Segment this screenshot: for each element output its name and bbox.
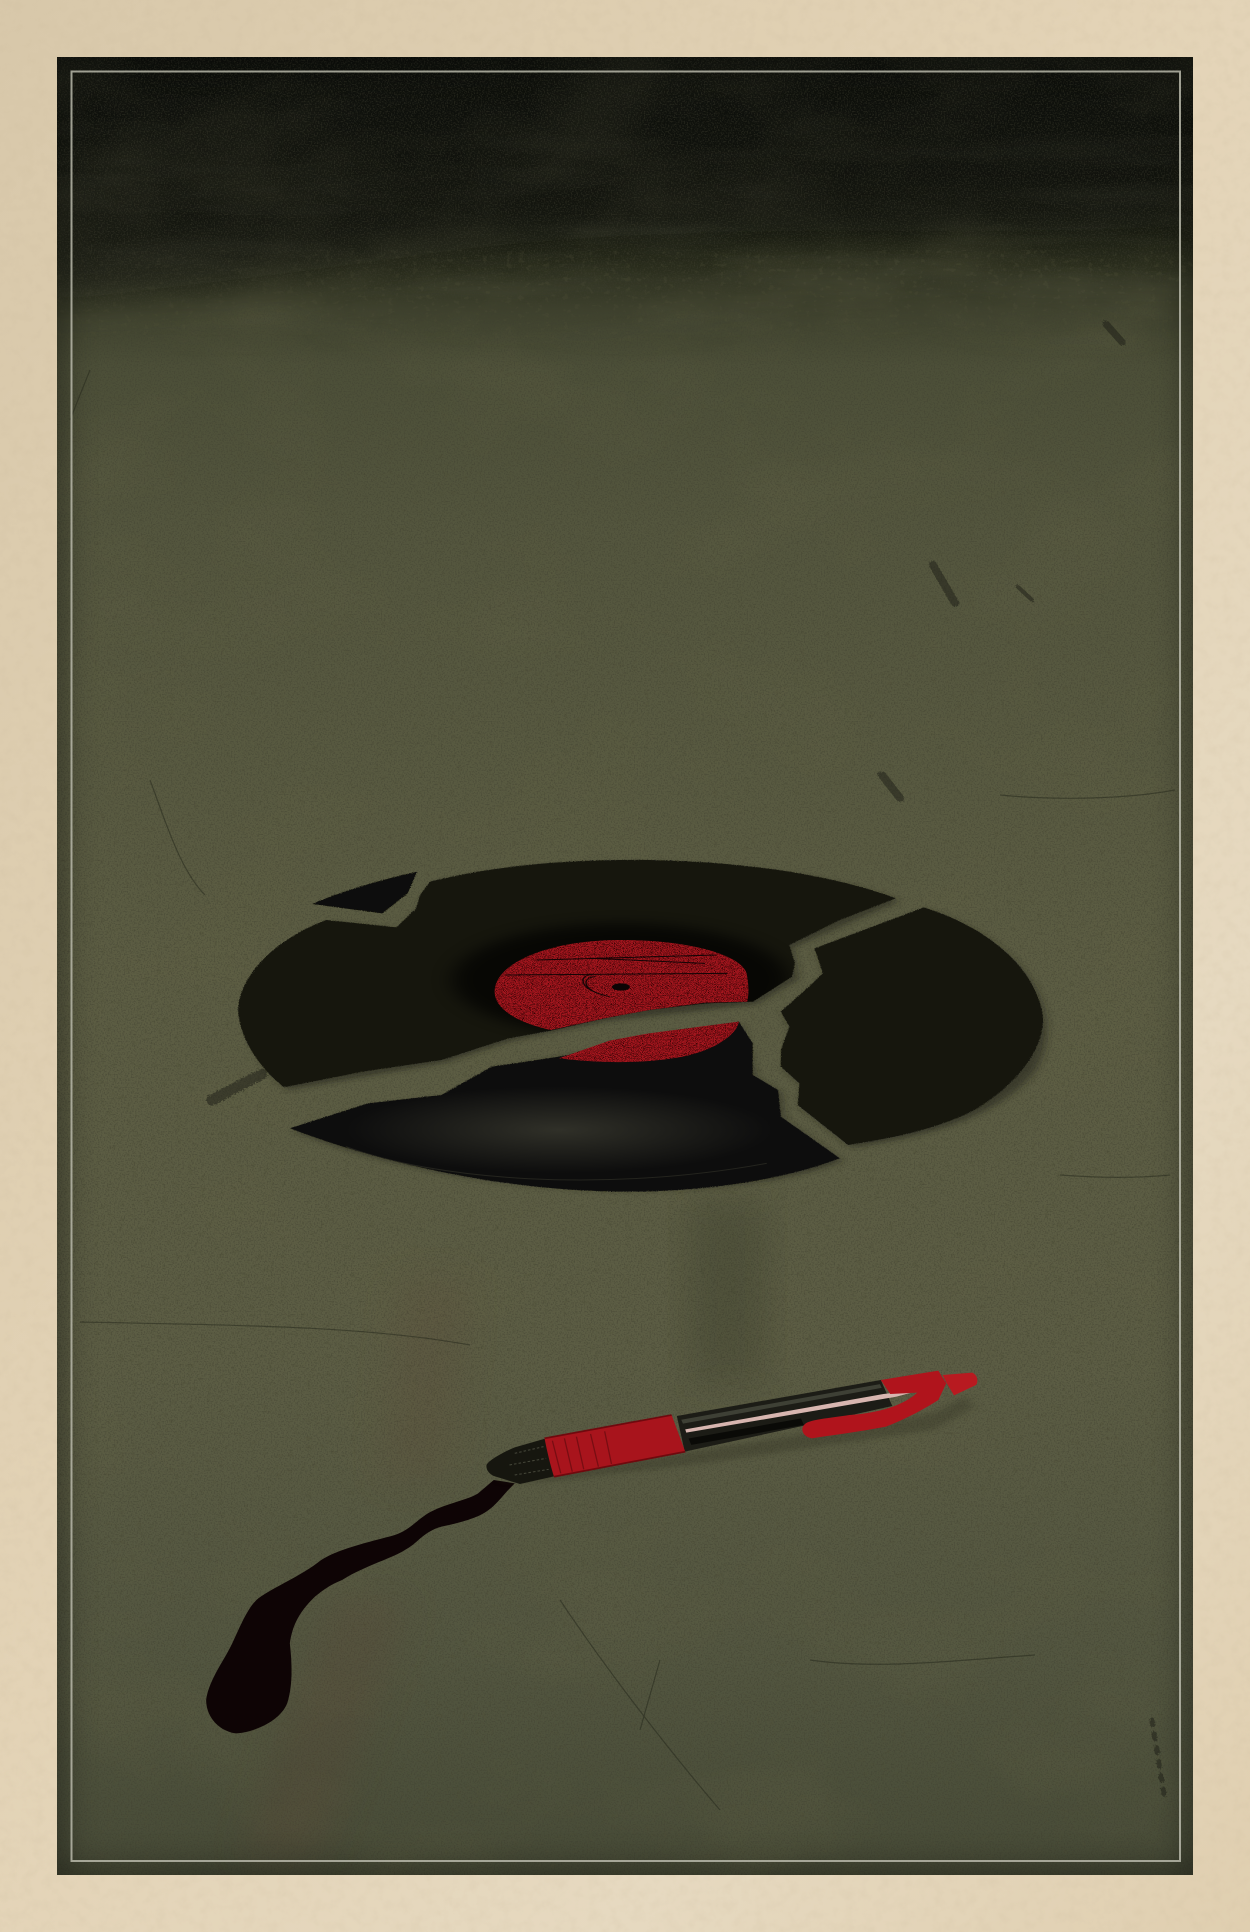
record piece: right section bbox=[781, 907, 1043, 1145]
pen barrel bbox=[677, 1380, 892, 1452]
ink puddle trail bbox=[206, 1480, 515, 1733]
record piece: main upper section bbox=[238, 860, 896, 1087]
pen tip bbox=[486, 1438, 556, 1484]
pen red clip bbox=[802, 1371, 946, 1438]
record piece: lower section bbox=[290, 1022, 840, 1192]
record piece: small top-left shard bbox=[312, 872, 417, 913]
pen refill highlight bbox=[685, 1390, 923, 1433]
pen shadow bbox=[494, 1397, 975, 1482]
record lower section sheen bbox=[346, 1097, 767, 1180]
record shards soft shadow bbox=[250, 863, 1046, 1190]
pen bbox=[486, 1371, 977, 1484]
pen red grip bbox=[545, 1415, 685, 1477]
broken vinyl record bbox=[238, 860, 1046, 1192]
record label: red centre bbox=[494, 940, 748, 1062]
floor scratches and scuffs bbox=[70, 324, 1175, 1810]
pen red button bbox=[943, 1373, 977, 1395]
record centre dark ring bbox=[453, 923, 789, 1037]
